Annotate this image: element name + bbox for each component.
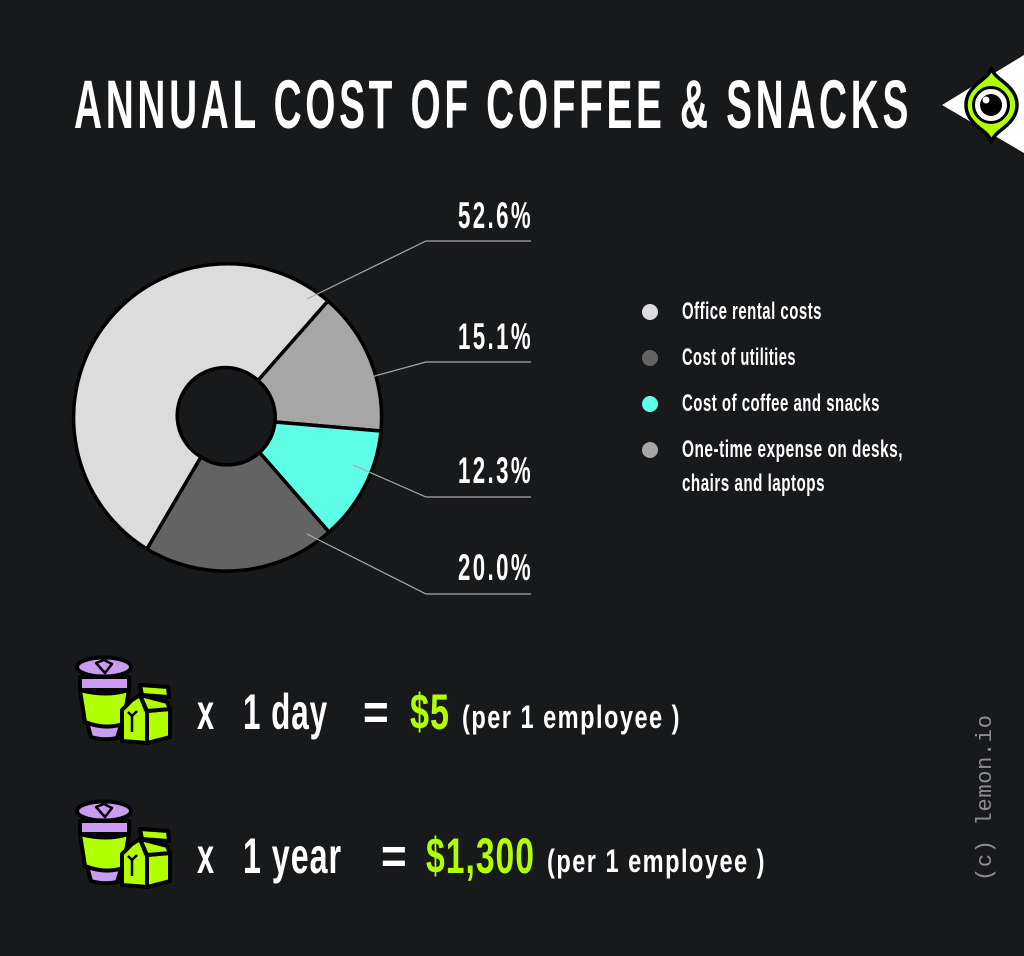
- leader line: 20.0%: [307, 534, 531, 594]
- legend item: cost of coffee and snacks: Cost of coffee and snacks: [682, 390, 880, 417]
- legend: [642, 298, 903, 497]
- leader line: 52.6%: [307, 241, 531, 299]
- icon: coffee cup and milk carton (year): [77, 802, 170, 887]
- slice: coffee and snacks 12.3%: [260, 422, 381, 532]
- legend item: cost of utilities: Cost of utilities: [682, 344, 796, 371]
- amount: $5: $5: [410, 684, 450, 740]
- value: 52.6%: 52.6%: [458, 195, 533, 236]
- icon: lemon eye logo: [942, 55, 1024, 153]
- legend item: cost of coffee and snacks: [642, 390, 880, 417]
- legend item: one-time expense: [642, 436, 903, 497]
- donut chart: [74, 264, 382, 571]
- leader line: 12.3%: [353, 465, 531, 497]
- leader line: 15.1%: [360, 362, 531, 380]
- equals sign: day: =: [363, 684, 390, 740]
- slice: utilities 20.0%: [147, 452, 329, 571]
- value: 12.3%: 12.3%: [458, 450, 533, 491]
- legend item: office rental costs: [642, 298, 822, 325]
- legend item: office rental costs: Office rental costs: [682, 298, 822, 325]
- value: 20.0%: 20.0%: [458, 547, 533, 588]
- legend item: cost of utilities: [642, 344, 796, 371]
- multiplier: x: x: [197, 828, 215, 884]
- value: 15.1%: 15.1%: [458, 316, 533, 357]
- credit: (c) lemon.io: (c) lemon.io: [973, 715, 998, 881]
- slice: one-time expense 15.1%: [258, 301, 382, 431]
- note: per 1 employee (day): (per 1 employee ): [462, 699, 681, 735]
- duration: 1 day: 1 day: [243, 684, 328, 740]
- slice: office rental 52.6%: [74, 264, 328, 549]
- multiplier: x: x: [197, 684, 215, 740]
- duration: 1 year: 1 year: [243, 828, 342, 884]
- amount: $1,300: $1,300: [426, 828, 535, 884]
- icon: coffee cup and milk carton (day): [77, 658, 170, 743]
- note: per 1 employee (year): (per 1 employee ): [547, 843, 766, 879]
- legend item: one-time expense: chairs and laptops: [682, 470, 825, 497]
- equals sign: year: =: [381, 828, 408, 884]
- legend item: one-time expense: One-time expense on desks,: [682, 436, 903, 463]
